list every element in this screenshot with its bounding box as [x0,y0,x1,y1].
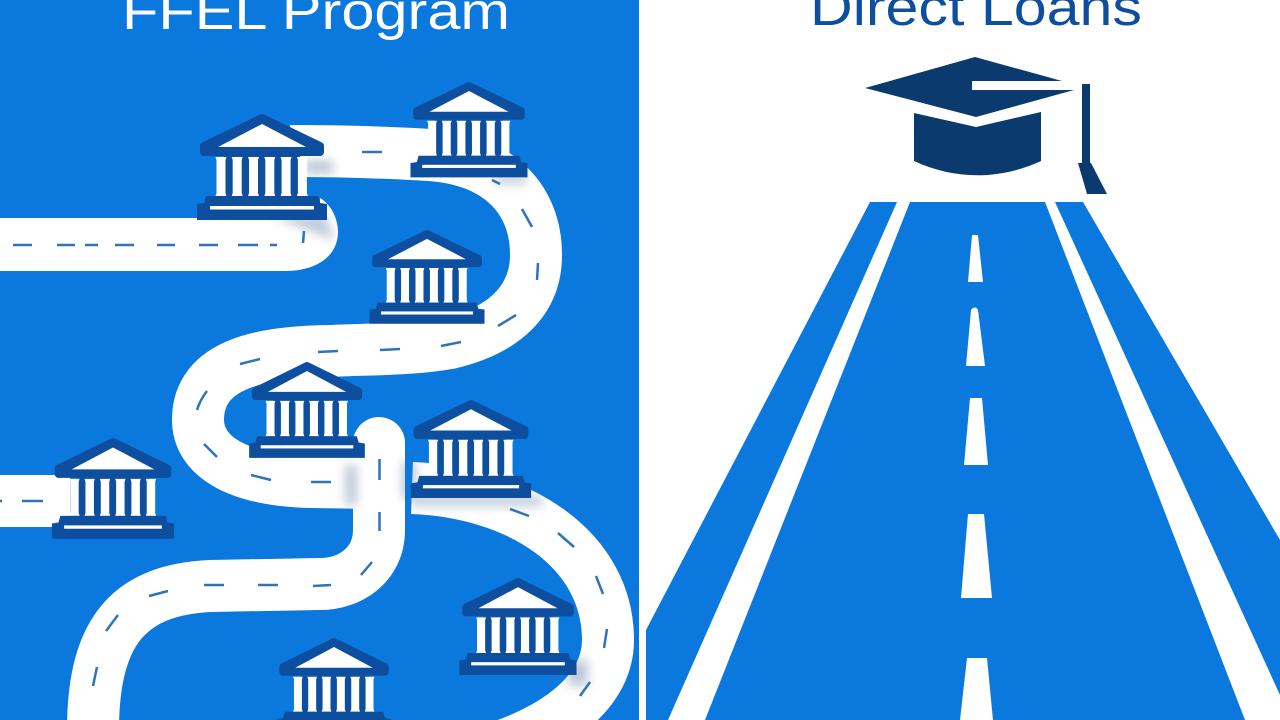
icon: bank 7 [460,582,576,675]
road shadows [270,160,588,686]
icon: bank 5 [411,404,531,498]
panel: Direct Loans [646,0,1280,720]
icon: bank 6 [52,442,174,539]
icon: bank 8 [277,642,391,720]
panel: FFEL Program [0,0,639,720]
icon: bank 4 [249,366,365,458]
icon: bank 2 [410,86,528,177]
winding road [0,151,608,720]
icon: graduation cap [865,57,1107,194]
icon: bank 1 [197,118,327,220]
road centre dashes [960,235,993,720]
icon: bank 3 [369,234,485,324]
straight road [646,202,1280,720]
road centre dashes [0,152,607,696]
